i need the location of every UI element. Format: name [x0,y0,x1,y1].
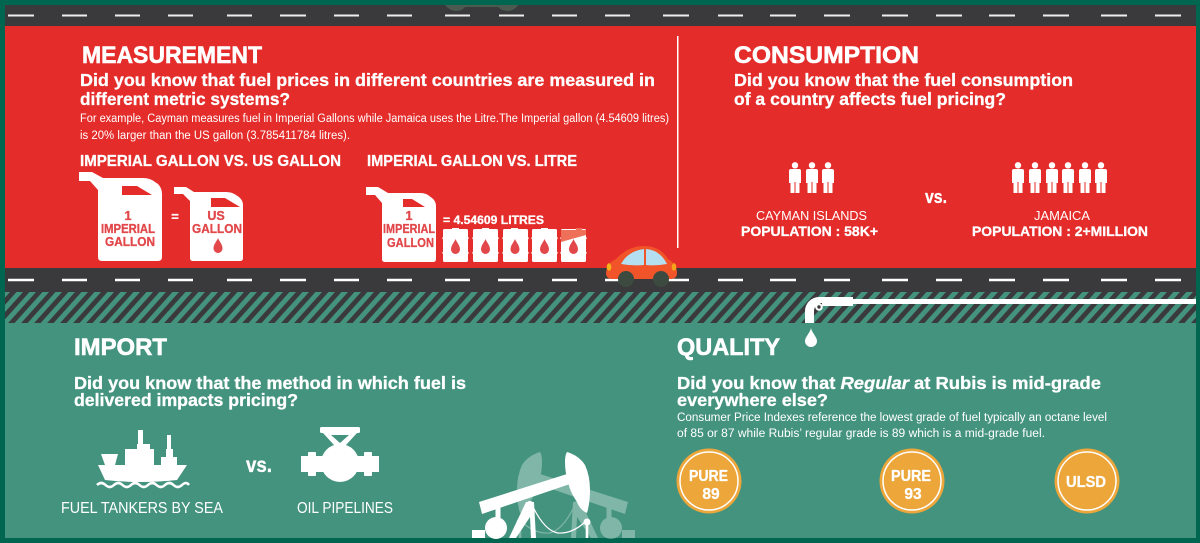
badge: ulsd: ULSD [1066,474,1106,491]
icon: imperial gallon jug: GALLON [105,235,155,249]
label: jamaica: POPULATION : 2+MILLION [972,223,1148,239]
text block: quality question: Did you know that Regular at Rubis is mid-grade [677,373,1101,393]
badge: pure 89 [676,448,742,514]
badge: pure 93: 93 [904,486,922,503]
text block: quality question [677,373,1101,410]
road: middle [5,268,1196,292]
label: litres: = 4.54609 LITRES [443,213,544,227]
equals sign: = [171,209,179,224]
text block: measurement question: different metric systems? [80,89,290,109]
road: top [5,5,1196,26]
icon: pipe with drop [805,297,1196,347]
label: cayman islands: POPULATION : 58K+ [741,223,878,239]
heading: import: IMPORT [74,334,167,361]
text block: quality question: everywhere else? [677,390,828,410]
icon: us gallon jug: GALLON [192,222,242,236]
badge: pure 89: PURE [689,468,728,485]
icon: imperial gallon jug: 1 [125,209,132,223]
text block: quality detail: of 85 or 87 while Rubis’ regular grade is 89 which is a mid-grade fuel. [677,428,1045,440]
label: cayman islands [741,208,878,239]
icon: us gallon jug [174,187,243,261]
text block: measurement question: Did you know that fuel prices in different countries are measured in [80,70,655,90]
badge: pure 93: PURE [891,468,931,485]
icon: imperial gallon jug [79,172,162,261]
icon: fuel tanker ship [97,430,189,487]
label: fuel tankers by sea: FUEL TANKERS BY SEA [61,500,223,517]
badge: ulsd [1054,448,1120,514]
label: cayman islands: CAYMAN ISLANDS [756,208,867,223]
icon: car [606,246,677,287]
icon: cayman population figures [789,162,834,193]
label: jamaica: JAMAICA [1034,208,1090,223]
label: oil pipelines: OIL PIPELINES [297,500,393,517]
icon: oil pumpjacks [472,452,635,539]
icon: jamaica population figures [1012,162,1107,193]
heading: consumption: CONSUMPTION [734,42,919,69]
label: vs consumption: vs. [925,187,947,207]
text block: consumption question [734,70,1073,109]
label: jamaica [972,208,1148,239]
text block: import question [74,373,466,410]
label: vs import: vs. [246,454,272,477]
badge: pure 93 [880,448,944,514]
text block: measurement question [80,70,655,109]
heading: quality: QUALITY [677,334,780,361]
divider line [677,36,678,248]
text block: measurement detail [80,113,669,142]
panel: teal lower section [5,320,1196,538]
icon: imperial gallon jug with litres: 1 [406,209,413,223]
icon: us gallon jug: US [207,209,225,223]
heading: measurement: MEASUREMENT [82,42,262,69]
panel: red upper section [5,26,1196,268]
subheading: imperial gallon vs us gallon: IMPERIAL GALLON VS. US GALLON [80,153,341,170]
subheading: imperial gallon vs litre: IMPERIAL GALLON VS. LITRE [367,153,577,170]
icon: imperial gallon jug with litres [366,187,436,262]
text block: measurement detail: is 20% larger than the US gallon (3.785411784 litres). [80,130,350,142]
hazard stripes [5,292,1196,323]
icon: barrels [442,228,587,262]
icon: imperial gallon jug: IMPERIAL [101,222,155,236]
text block: quality detail: Consumer Price Indexes reference the lowest grade of fuel typically an octane level [677,412,1107,424]
text block: consumption question: Did you know that the fuel consumption [734,70,1073,90]
icon: imperial gallon jug with litres: IMPERIAL [383,222,435,236]
text block: import question: delivered impacts pricing? [74,390,298,410]
badge: pure 89: 89 [702,486,720,503]
icon: imperial gallon jug with litres: GALLON [387,236,434,250]
icon: oil pipeline valve [301,427,379,482]
text block: import question: Did you know that the method in which fuel is [74,373,466,393]
text block: measurement detail: For example, Cayman measures fuel in Imperial Gallons while Jamaica uses the Litre.The Imperial gallon (4.54609 litres) [80,113,669,125]
text block: consumption question: of a country affects fuel pricing? [734,89,1006,109]
text block: quality detail [677,412,1107,440]
